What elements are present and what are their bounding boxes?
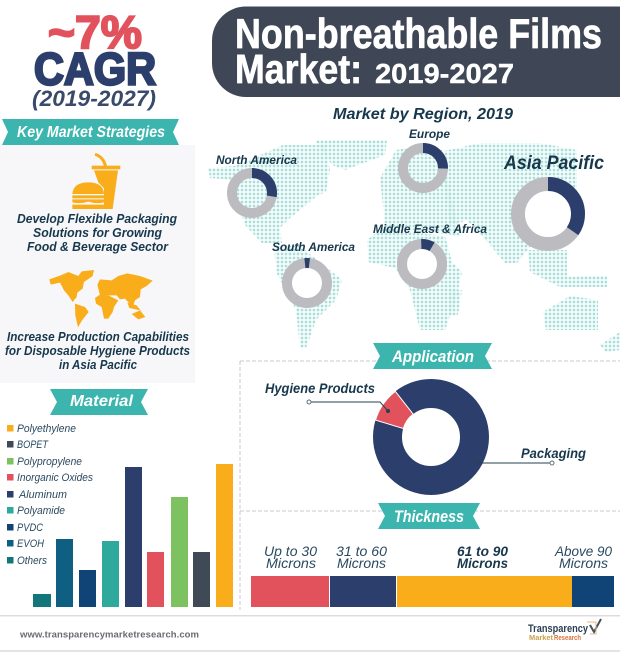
donut: Asia Pacific: Asia Pacific: [503, 153, 604, 174]
header banner: 2019-2027: [375, 58, 514, 89]
CAGR callout: (2019-2027): [32, 86, 156, 111]
labels: thickness ranges: Microns: [337, 555, 386, 571]
donut: Europe: [403, 127, 450, 188]
text: packaging strategy: [17, 211, 177, 254]
labels: thickness ranges: Microns: [266, 555, 316, 571]
icon: burger and drink: [72, 154, 120, 209]
ribbon: application: Application: [391, 347, 474, 366]
chart: dotted world map: [208, 140, 620, 352]
ribbon: thickness: Thickness: [394, 507, 464, 526]
label: hygiene products: Hygiene Products: [265, 380, 375, 396]
donut: Europe: Europe: [409, 127, 450, 141]
chart: thickness stacked bar: [251, 543, 614, 607]
donut: Middle East and Africa: Middle East & Africa: [373, 222, 487, 236]
legend: material: BOPET: [17, 439, 49, 451]
legend: material: Others: [17, 555, 47, 567]
legend: material: Polyamide: [17, 505, 65, 517]
legend: material: Inorganic Oxides: [17, 472, 93, 484]
ribbon: material: Material: [70, 393, 134, 410]
header banner: [212, 6, 620, 97]
chart: application donut: [265, 380, 586, 480]
logo: Transparency Market Research: Transparency: [528, 623, 589, 635]
labels: thickness ranges: Microns: [559, 555, 608, 571]
labels: thickness ranges: [264, 543, 612, 571]
label: packaging: Packaging: [521, 445, 586, 461]
website url: www.transparencymarketresearch.com: [19, 630, 199, 640]
text: production strategy: for Disposable Hygiene Products: [5, 343, 190, 358]
labels: thickness ranges: 31 to 60: [336, 543, 387, 559]
CAGR callout: CAGR: [34, 44, 156, 94]
donut: North America: North America: [216, 153, 297, 167]
label: packaging: [475, 445, 586, 465]
bar chart: material: [33, 464, 233, 607]
footer: [0, 615, 620, 652]
panel: key market strategies: [0, 119, 195, 383]
heading: market by region: Market by Region, 2019: [333, 106, 513, 123]
legend: material: Aluminum: [18, 489, 67, 501]
text: packaging strategy: Develop Flexible Packaging: [17, 211, 177, 226]
labels: thickness ranges: Up to 30: [264, 543, 317, 559]
CAGR callout: ~7%: [48, 6, 142, 58]
legend: material: EVOH: [17, 538, 44, 550]
donut: South America: South America: [272, 240, 355, 254]
text: production strategy: [5, 329, 190, 372]
legend: material: Polypropylene: [17, 456, 82, 468]
donut: Middle East and Africa: [373, 222, 487, 285]
labels: thickness ranges: 61 to 90: [457, 543, 508, 559]
ribbon: key market strategies: Key Market Strategies: [17, 124, 165, 141]
segment: hygiene products: [376, 391, 413, 428]
label: hygiene products: [265, 380, 390, 413]
legend: material: [7, 423, 93, 567]
text: production strategy: Increase Production Capabilities: [7, 329, 189, 344]
panel borders: application and thickness: [240, 361, 620, 610]
ribbon: key market strategies: [2, 119, 179, 145]
logo: Transparency Market Research: Research: [554, 633, 581, 642]
logo: Transparency Market Research: [528, 619, 601, 642]
ribbon: material: [50, 389, 148, 415]
donut: Asia Pacific: [503, 153, 604, 244]
CAGR callout: [32, 6, 156, 111]
labels: thickness ranges: Microns: [457, 555, 508, 571]
text: production strategy: in Asia Pacific: [59, 357, 138, 372]
text: packaging strategy: Solutions for Growing: [33, 225, 162, 240]
text: packaging strategy: Food & Beverage Sector: [27, 239, 169, 254]
ribbon: thickness: [378, 503, 480, 529]
legend: material: PVDC: [17, 522, 43, 534]
logo: Transparency Market Research: Market: [529, 633, 553, 642]
donut: North America: [216, 153, 297, 213]
donut: South America: [272, 240, 355, 305]
legend: material: Polyethylene: [17, 423, 76, 435]
header banner: Market:: [235, 46, 362, 92]
ribbon: application: [373, 343, 492, 369]
icon: amber world map: [49, 270, 153, 327]
labels: thickness ranges: Above 90: [554, 543, 612, 559]
